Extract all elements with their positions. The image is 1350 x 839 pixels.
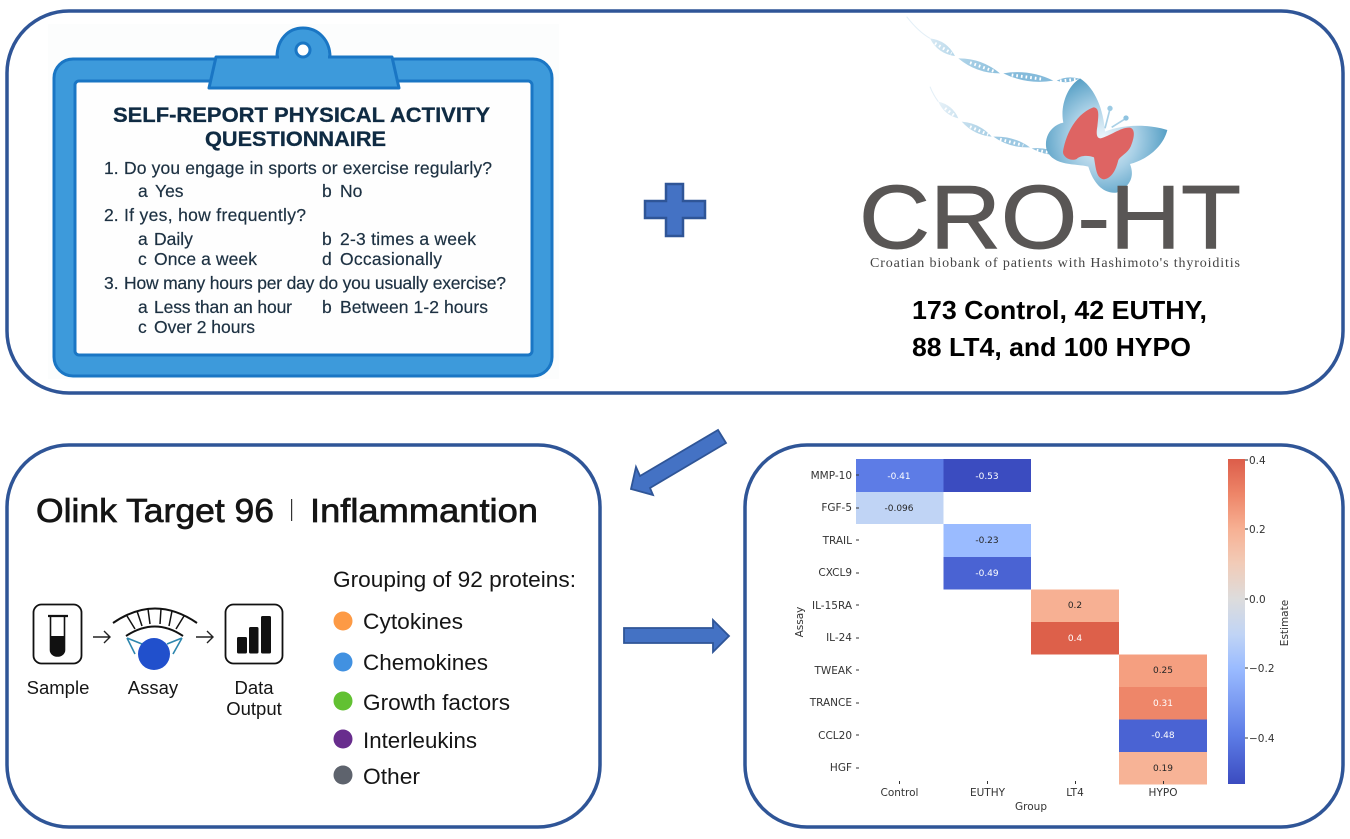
workflow labels: Assay <box>128 677 179 698</box>
y axis labels: IL-15RA <box>812 600 853 612</box>
Olink title: Inflammantion <box>310 493 538 530</box>
heatmap values: -0.096 <box>884 504 914 514</box>
questionnaire questions: a <box>138 297 148 317</box>
questionnaire questions: 2-3 times a week <box>340 229 476 249</box>
heatmap cells <box>856 459 1207 784</box>
protein group legend <box>334 609 510 789</box>
protein grouping heading: Grouping of 92 proteins: <box>333 567 576 592</box>
questionnaire questions: Yes <box>155 181 184 201</box>
x axis labels: LT4 <box>1066 787 1084 799</box>
questionnaire questions: b <box>322 297 332 317</box>
questionnaire questions: c <box>138 249 147 269</box>
y axis labels: TRAIL <box>822 535 852 547</box>
heatmap values: -0.41 <box>887 472 911 482</box>
y axis labels <box>809 470 859 774</box>
y axis labels: MMP-10 <box>811 470 852 482</box>
questionnaire questions: b <box>322 181 332 201</box>
logo wordmark: CRO-HT <box>859 168 1241 268</box>
questionnaire questions: Over 2 hours <box>154 317 255 337</box>
heatmap values: -0.48 <box>1151 731 1175 741</box>
protein group legend: Chemokines <box>363 650 488 675</box>
y axis title: Assay <box>794 607 806 637</box>
questionnaire questions: b <box>322 229 332 249</box>
heatmap values: -0.53 <box>975 472 999 482</box>
questionnaire questions: Once a week <box>154 249 257 269</box>
arrow: assay to data output <box>196 631 213 643</box>
colour bar: −0.4 <box>1249 733 1275 745</box>
y axis labels: IL-24 <box>826 632 852 644</box>
questionnaire questions: 1. <box>104 158 119 178</box>
questionnaire questions: 2. <box>104 205 119 225</box>
colour bar: 0.4 <box>1249 455 1266 467</box>
y axis labels: CCL20 <box>818 730 852 742</box>
heatmap values: 0.4 <box>1068 634 1082 644</box>
questionnaire questions: 3. <box>104 273 119 293</box>
questionnaire questions: No <box>340 181 362 201</box>
x axis labels: EUTHY <box>970 787 1006 799</box>
icon: butterfly thyroid logo <box>907 17 1167 193</box>
workflow labels: Sample <box>27 677 89 698</box>
questionnaire questions: If yes, how frequently? <box>124 205 306 225</box>
heatmap values: 0.25 <box>1153 666 1173 676</box>
questionnaire questions: How many hours per day do you usually exercise? <box>124 273 506 293</box>
x axis title: Group <box>1015 801 1047 813</box>
workflow labels <box>27 677 282 719</box>
arrow: sample to assay <box>93 631 110 643</box>
Olink title <box>36 493 538 530</box>
heatmap values: 0.19 <box>1153 764 1173 774</box>
colour bar: −0.2 <box>1249 663 1274 675</box>
workflow labels: Output <box>226 698 282 719</box>
colour bar title: Estimate <box>1279 600 1291 646</box>
arrow: to Olink panel <box>631 430 726 495</box>
icon: data output <box>226 604 282 664</box>
y axis labels: HGF <box>830 762 852 774</box>
y axis labels: CXCL9 <box>818 567 852 579</box>
protein group legend: Cytokines <box>363 609 463 634</box>
colour bar: 0.2 <box>1249 524 1266 536</box>
colour bar <box>1228 455 1275 784</box>
protein group legend: Other <box>363 764 421 789</box>
Olink title: Olink Target 96 <box>36 493 274 530</box>
plus icon <box>645 184 705 236</box>
questionnaire questions: a <box>138 229 148 249</box>
cohort counts: 88 LT4, and 100 HYPO <box>912 332 1191 362</box>
heatmap values: 0.31 <box>1153 699 1173 709</box>
questionnaire questions: d <box>322 249 332 269</box>
clipboard questionnaire <box>48 24 559 379</box>
x axis labels: Control <box>881 787 918 799</box>
protein group legend: Interleukins <box>363 728 477 753</box>
y axis labels: TWEAK <box>814 665 853 677</box>
heatmap values: 0.2 <box>1068 601 1082 611</box>
questionnaire title: SELF-REPORT PHYSICAL ACTIVITY <box>113 103 490 127</box>
panel: heatmap <box>745 445 1343 827</box>
questionnaire title <box>113 103 490 151</box>
colour bar: 0.0 <box>1249 594 1266 606</box>
heatmap values <box>884 472 1175 774</box>
panel: questionnaire and biobank <box>7 11 1343 393</box>
icon: sample tube <box>34 604 82 664</box>
questionnaire questions: Occasionally <box>340 249 442 269</box>
questionnaire questions: Between 1-2 hours <box>340 297 488 317</box>
icon: assay <box>113 608 197 670</box>
y axis labels: TRANCE <box>809 697 852 709</box>
cohort counts: 173 Control, 42 EUTHY, <box>912 295 1207 325</box>
questionnaire questions: Daily <box>154 229 193 249</box>
cohort counts <box>912 295 1207 362</box>
y axis labels: FGF-5 <box>821 502 852 514</box>
questionnaire questions: a <box>138 181 148 201</box>
protein group legend: Growth factors <box>363 690 510 715</box>
panel: Olink Target 96 <box>7 445 600 827</box>
logo subtitle: Croatian biobank of patients with Hashimoto's thyroiditis <box>870 256 1240 271</box>
arrow: to heatmap panel <box>624 620 729 652</box>
workflow labels: Data <box>234 677 274 698</box>
questionnaire questions: Do you engage in sports or exercise regularly? <box>124 158 492 178</box>
questionnaire questions <box>104 158 506 337</box>
questionnaire title: QUESTIONNAIRE <box>205 127 386 151</box>
heatmap values: -0.49 <box>975 569 999 579</box>
questionnaire questions: c <box>138 317 147 337</box>
x axis labels: HYPO <box>1149 787 1177 799</box>
x axis labels <box>881 781 1177 799</box>
questionnaire questions: Less than an hour <box>154 297 292 317</box>
heatmap values: -0.23 <box>975 536 999 546</box>
